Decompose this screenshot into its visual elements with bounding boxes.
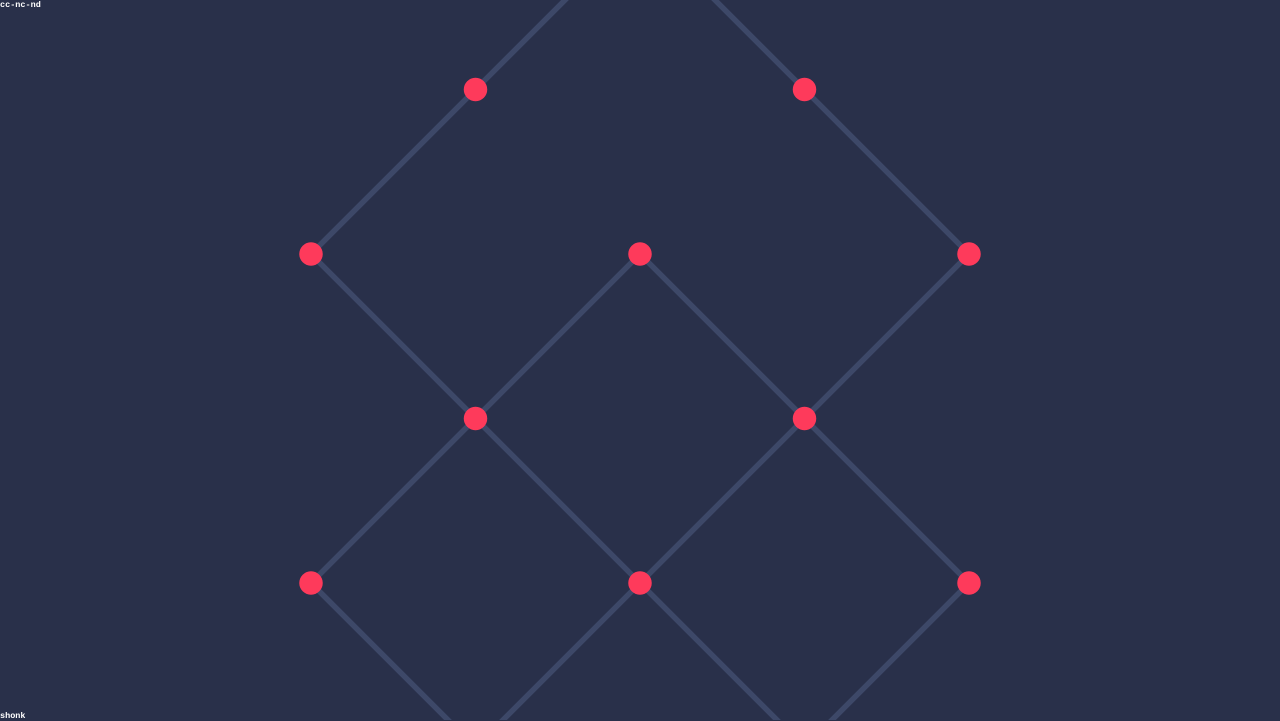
connecting lines <box>311 0 969 721</box>
nodes <box>299 78 981 595</box>
author label: shonk <box>0 711 26 721</box>
license label: cc-nc-nd <box>0 0 41 10</box>
